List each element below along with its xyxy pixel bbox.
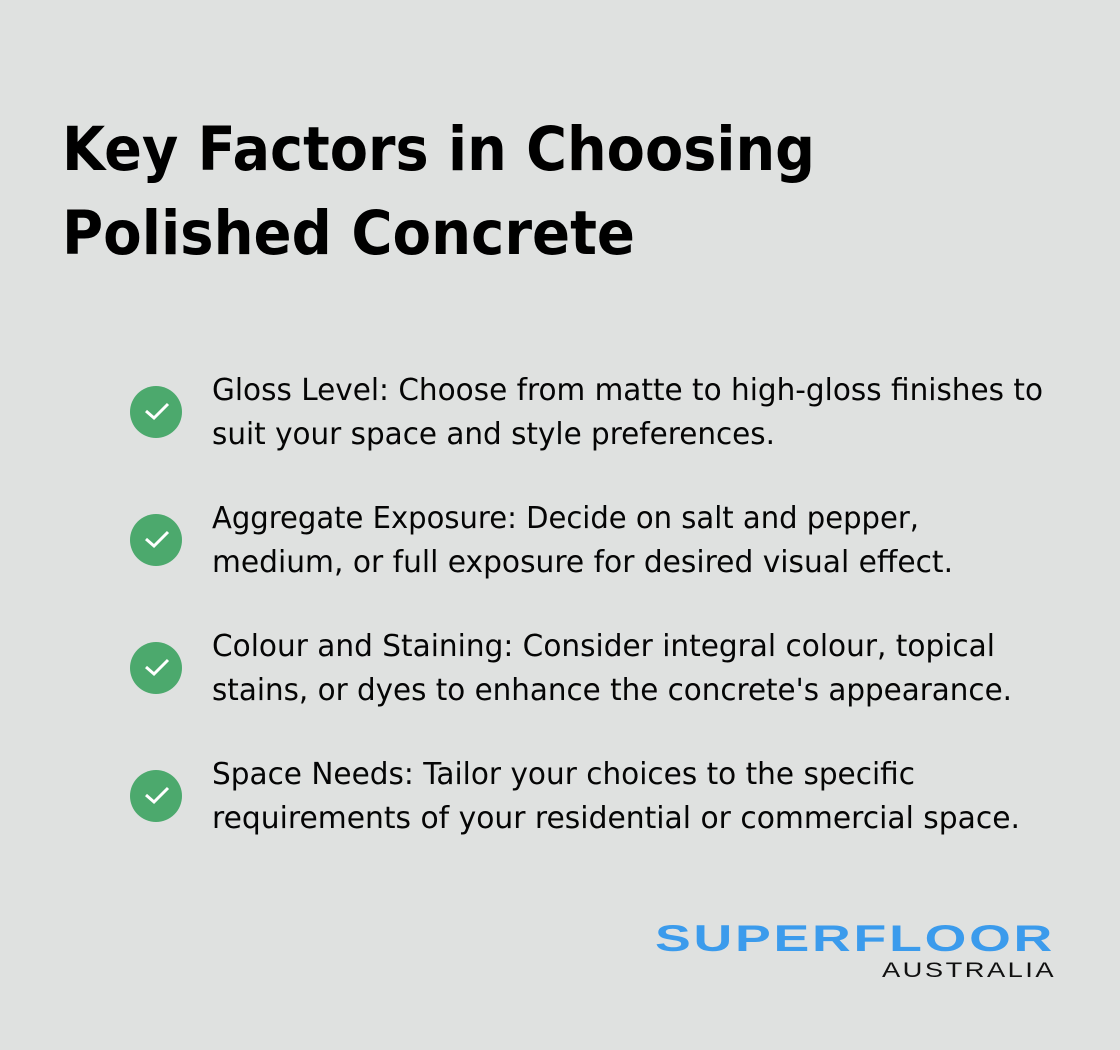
item: aggregate exposure xyxy=(130,501,953,580)
title: Polished Concrete xyxy=(62,198,635,269)
item: gloss level xyxy=(130,373,1043,452)
logo: Superfloor Australia xyxy=(655,917,1054,982)
checklist xyxy=(130,373,1043,836)
item: space needs: Space Needs: Tailor your choices to the specific xyxy=(212,757,915,792)
item: aggregate exposure: Aggregate Exposure: Decide on salt and pepper, xyxy=(212,501,919,536)
item: aggregate exposure: medium, or full exposure for desired visual effect. xyxy=(212,545,953,580)
title xyxy=(62,114,815,269)
item: gloss level: Gloss Level: Choose from matte to high-gloss finishes to xyxy=(212,373,1043,408)
item: space needs: requirements of your residential or commercial space. xyxy=(212,801,1020,836)
item: colour and staining: Colour and Staining: Consider integral colour, topical xyxy=(212,629,995,664)
item: space needs xyxy=(130,757,1020,836)
logo: Superfloor Australia: AUSTRALIA xyxy=(882,959,1054,982)
item: colour and staining xyxy=(130,629,1012,708)
logo: Superfloor Australia: SUPERFLOOR xyxy=(655,917,1052,959)
title: Key Factors in Choosing xyxy=(62,114,815,185)
item: gloss level: suit your space and style preferences. xyxy=(212,417,775,452)
item: colour and staining: stains, or dyes to enhance the concrete's appearance. xyxy=(212,673,1012,708)
